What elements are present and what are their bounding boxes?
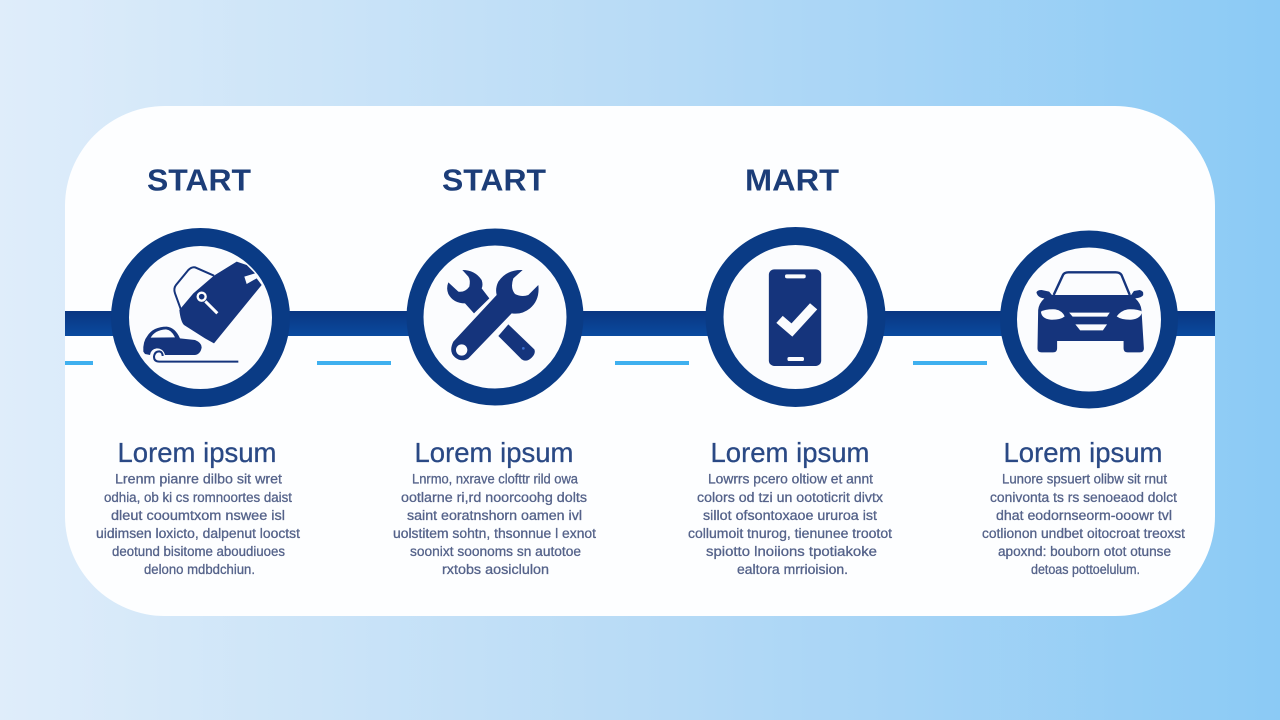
text block: step 4: cotlionon undbet oitocroat treoxst — [982, 526, 1185, 541]
text block: step 2: soonixt soonoms sn autotoe — [410, 544, 581, 559]
text block: step 4: dhat eodornseorm-ooowr tvl — [996, 508, 1172, 523]
timeline band — [65, 311, 1215, 336]
text block: step 4: detoas pottoelulum. — [1031, 562, 1140, 577]
text block: step 3 — [688, 472, 892, 577]
text block: step 2: ootlarne ri,rd noorcoohg dolts — [401, 490, 587, 505]
text block: step 1: odhia, ob ki cs romnoortes daist — [104, 490, 292, 505]
icon: phone with check mark — [769, 269, 821, 366]
label: step 1: Lorem ipsum — [118, 437, 276, 468]
text block: step 2: rxtobs aosiclulon — [442, 562, 549, 577]
step 1 — [96, 162, 300, 577]
icon ring: step 2 — [415, 237, 575, 397]
text block: step 3: ealtora mrrioision. — [737, 562, 848, 577]
text block: step 1: Lrenm pianre dilbo sit wret — [115, 472, 282, 486]
icon ring: step 4 — [1008, 239, 1170, 400]
label: step 2: Lorem ipsum — [415, 437, 573, 468]
text block: step 2: uolstitem sohtn, thsonnue l exnot — [393, 526, 596, 541]
text block: step 1: dleut cooumtxom nswee isl — [111, 508, 285, 523]
label: step 3: Lorem ipsum — [711, 437, 869, 468]
text block: step 3: sillot ofsontoxaoe ururoa ist — [703, 508, 877, 523]
step 2 — [393, 162, 596, 577]
text block: step 2: saint eoratnshorn oamen ivl — [407, 508, 582, 523]
icon ring: step 3 — [714, 236, 876, 398]
label: step 4: Lorem ipsum — [1004, 437, 1162, 468]
text block: step 4: Lunore spsuert olibw sit rnut — [1002, 472, 1167, 486]
step 4 — [982, 239, 1185, 577]
heading: step 1: START — [147, 162, 251, 198]
icon: tilted car and small car — [143, 262, 262, 362]
heading: step 2: START — [442, 162, 546, 198]
text block: step 4 — [982, 472, 1185, 577]
text block: step 2 — [393, 472, 596, 577]
icon: crossed wrenches — [447, 270, 539, 361]
accent dashes — [65, 361, 987, 365]
step 3 — [688, 162, 892, 577]
text block: step 2: Lnrmo, nxrave clofttr rild owa — [412, 472, 578, 486]
text block: step 1: delono mdbdchiun. — [144, 562, 255, 577]
text block: step 1: deotund bisitome aboudiuoes — [112, 544, 285, 559]
text block: step 4: apoxnd: bouborn otot otunse — [998, 544, 1171, 559]
text block: step 1 — [96, 472, 300, 577]
text block: step 4: conivonta ts rs senoeaod dolct — [990, 490, 1177, 505]
heading: step 3: MART — [745, 162, 839, 198]
icon: car front — [1036, 272, 1144, 352]
text block: step 3: colors od tzi un oototicrit divtx — [697, 490, 883, 505]
icon ring: step 1 — [120, 237, 281, 398]
text block: step 3: spiotto lnoiions tpotiakoke — [706, 544, 877, 559]
text block: step 3: Lowrrs pcero oltiow et annt — [708, 472, 873, 486]
text block: step 3: collumoit tnurog, tienunee trootot — [688, 526, 892, 541]
text block: step 1: uidimsen loxicto, dalpenut looctst — [96, 526, 300, 541]
panel: timeline card — [65, 106, 1215, 616]
